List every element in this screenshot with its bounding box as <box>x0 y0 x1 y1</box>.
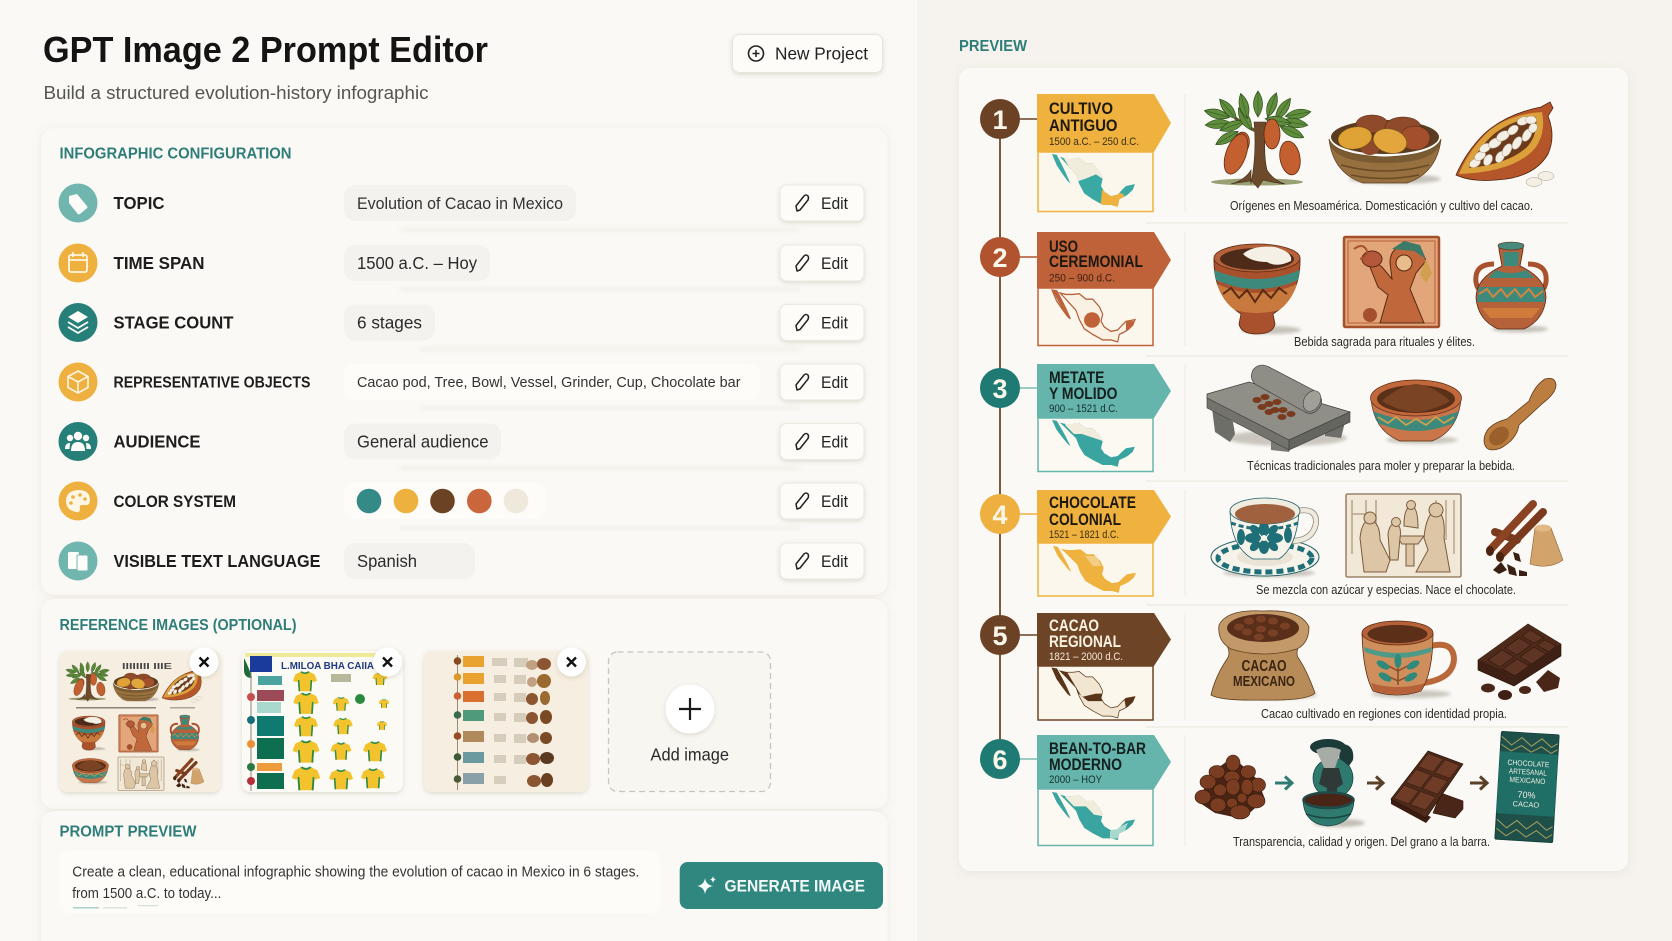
generate image button <box>680 862 883 909</box>
stage 1 <box>980 91 1554 213</box>
row: audience: Edit <box>821 434 848 452</box>
row: visible text language: Edit <box>821 553 848 571</box>
stage 4 banner: CHOCOLATE <box>1049 494 1136 512</box>
row: audience: AUDIENCE <box>114 432 200 452</box>
button: remove image 3 <box>557 648 586 676</box>
stage 4 caption: Se mezcla con azúcar y especias. Nace el chocolate. <box>1256 583 1516 597</box>
row: time span: Edit <box>821 255 848 273</box>
stage 6 banner <box>1037 735 1171 789</box>
row: stage count <box>58 303 864 342</box>
stage 4 number: 4 <box>992 500 1008 530</box>
title: GPT Image 2 Prompt Editor <box>43 29 488 70</box>
row: stage count: 6 stages <box>357 312 422 332</box>
panel: reference images <box>41 599 888 809</box>
icon: packaged chocolate: 70% <box>1517 789 1536 801</box>
icon: cacao tree <box>1203 91 1312 188</box>
panel: infographic configuration <box>41 128 888 595</box>
row: time span <box>58 244 864 282</box>
stage 6 map <box>1038 789 1153 846</box>
stage 2 <box>980 232 1548 349</box>
row: representative objects: Edit <box>821 374 848 392</box>
stage 2 banner: 250 – 900 d.C. <box>1049 272 1115 284</box>
stage 2 number <box>980 237 1040 277</box>
arrow: bar to packaged chocolate <box>1470 776 1487 790</box>
icon: metate grinding stone <box>1207 365 1350 452</box>
stage 5 banner: CACAO <box>1049 617 1099 635</box>
stage 1 banner: 1500 a.C. – 250 d.C. <box>1049 136 1139 148</box>
icon: packaged chocolate: CACAO <box>1512 799 1540 810</box>
heading: prompt preview: PROMPT PREVIEW <box>60 824 197 840</box>
stage 4 banner: 1521 – 1821 d.C. <box>1049 529 1119 541</box>
row: color system <box>58 482 864 520</box>
icon: clay mug <box>1362 621 1454 698</box>
thumbnail: cacao infographic <box>60 651 220 792</box>
stage 2 banner: USO <box>1049 238 1078 256</box>
stage 3 caption: Técnicas tradicionales para moler y preparar la bebida. <box>1247 459 1515 473</box>
stage 3 number <box>980 368 1040 408</box>
heading: preview: PREVIEW <box>959 38 1028 55</box>
icon: packaged chocolate <box>1495 731 1559 843</box>
arrow: beans to machine <box>1275 776 1292 790</box>
row: stage count: Edit <box>821 314 848 332</box>
row: topic <box>58 184 864 222</box>
row: time span: TIME SPAN <box>114 253 204 273</box>
page background: right preview column <box>917 0 1672 941</box>
icon: wooden spoon <box>1484 378 1556 450</box>
stage 2 caption: Bebida sagrada para rituales y élites. <box>1294 335 1475 349</box>
stage 6 <box>980 731 1559 849</box>
arrow: machine to bar <box>1367 776 1383 790</box>
icon: grinder machine <box>1303 739 1365 827</box>
icon: sack of cacao <box>1211 611 1317 700</box>
icon: cinnamon, piloncillo and cloves <box>1486 504 1563 576</box>
panel: prompt preview <box>41 811 888 941</box>
prompt text box: from 1500 a.C. to today... <box>72 886 221 902</box>
timeline line <box>999 119 1001 759</box>
row: stage count: STAGE COUNT <box>114 312 234 332</box>
stage 3 banner <box>1037 364 1171 418</box>
stage 1 number: 1 <box>992 105 1008 135</box>
prompt text box: Create a clean, educational infographic showing the evolution of cacao in Mexico in 6 stages. <box>72 864 639 880</box>
stage 3 <box>980 364 1556 473</box>
icon: sack of cacao: MEXICANO <box>1233 673 1295 690</box>
icon: chocolate bar pieces <box>1478 624 1561 700</box>
icon: talavera cup and saucer <box>1211 498 1319 577</box>
stage 5 caption: Cacao cultivado en regiones con identidad propia. <box>1261 707 1507 721</box>
stage 4 number <box>980 494 1040 534</box>
stage 1 banner: CULTIVO <box>1049 100 1113 118</box>
stage 3 banner: 900 – 1521 d.C. <box>1049 403 1118 415</box>
stage 1 banner <box>1037 94 1171 152</box>
row: representative objects <box>58 362 864 402</box>
icon: packaged chocolate: CHOCOLATE <box>1507 758 1550 769</box>
stage 5 number <box>980 615 1040 655</box>
icon: chocolate bar tablet <box>1391 751 1463 823</box>
button: remove image 2 <box>373 648 402 676</box>
new project button: New Project <box>775 44 868 64</box>
stage 4 banner <box>1037 490 1171 543</box>
stage 3 banner: METATE <box>1049 369 1104 387</box>
row: time span: 1500 a.C. – Hoy <box>357 253 477 273</box>
icon: packaged chocolate: MEXICANO <box>1509 775 1546 786</box>
icon: open cacao pod <box>1456 102 1554 186</box>
icon: ceremonial cup <box>1214 244 1301 334</box>
row: color system: Edit <box>821 493 848 511</box>
row: representative objects: REPRESENTATIVE OBJECTS <box>114 374 311 392</box>
row: audience <box>58 422 864 461</box>
thumbnail: jersey infographic <box>242 651 403 792</box>
heading: reference images: REFERENCE IMAGES (OPTIONAL) <box>60 617 296 634</box>
stage 5 number: 5 <box>992 621 1008 651</box>
icon: cacao beans pile <box>1195 755 1266 819</box>
stage 3 number: 3 <box>992 374 1008 404</box>
thumbnail: jersey infographic: L.MILOA BHA CAIIA <box>281 660 374 672</box>
stage 6 banner: BEAN-TO-BAR <box>1049 740 1146 758</box>
icon: mayan codex panel <box>1344 237 1439 327</box>
add image tile <box>608 652 770 792</box>
stage 3 banner: Y MOLIDO <box>1049 385 1118 403</box>
stage 3 map <box>1038 418 1153 472</box>
stage 2 number: 2 <box>992 243 1008 273</box>
stage 4 <box>980 490 1563 597</box>
new project button <box>732 34 882 72</box>
icon: basket of pods <box>1329 115 1441 184</box>
add image tile: Add image <box>650 744 729 764</box>
icon: sack of cacao: CACAO <box>1242 658 1286 675</box>
button: remove image 1 <box>190 648 218 676</box>
stage 5 banner: REGIONAL <box>1049 633 1121 651</box>
row: representative objects: Cacao pod, Tree, Bowl, Vessel, Grinder, Cup, Chocolate bar <box>357 374 740 391</box>
stage 6 caption: Transparencia, calidad y origen. Del grano a la barra. <box>1233 835 1490 849</box>
stage 6 number: 6 <box>992 745 1008 775</box>
stage 4 banner: COLONIAL <box>1049 511 1121 529</box>
icon: ground cacao bowl <box>1370 380 1462 444</box>
icon: colonial sketch panel <box>1346 494 1461 577</box>
icon: packaged chocolate: ARTESANAL <box>1509 766 1547 778</box>
thumbnail: timeline infographic <box>424 651 588 792</box>
subtitle: Build a structured evolution-history infographic <box>44 82 428 103</box>
stage 6 banner: 2000 – HOY <box>1049 774 1103 786</box>
row: topic: TOPIC <box>114 193 165 213</box>
stage 1 number <box>980 99 1040 139</box>
prompt text box <box>60 851 660 913</box>
stage 2 banner <box>1037 232 1171 288</box>
stage 6 number <box>980 739 1040 779</box>
thumbnail: cacao infographic: IIIIIIII IIIE <box>122 662 173 671</box>
row: visible text language: Spanish <box>357 551 417 571</box>
row: color system: COLOR SYSTEM <box>114 492 236 511</box>
stage 2 banner: CEREMONIAL <box>1049 253 1143 271</box>
panel: preview infographic <box>959 68 1628 871</box>
row: audience: General audience <box>357 432 488 452</box>
generate image button: GENERATE IMAGE <box>724 876 865 896</box>
stage 6 banner: MODERNO <box>1049 756 1122 774</box>
stage 5 banner: 1821 – 2000 d.C. <box>1049 651 1123 663</box>
stage 5 banner <box>1037 613 1171 666</box>
stage 5 <box>980 611 1561 721</box>
stage 1 caption: Orígenes en Mesoamérica. Domesticación y cultivo del cacao. <box>1230 199 1533 213</box>
stage 1 banner: ANTIGUO <box>1049 117 1118 135</box>
heading: infographic configuration: INFOGRAPHIC CONFIGURATION <box>60 146 292 162</box>
stage 4 map <box>1038 543 1153 596</box>
stage 1 map <box>1038 152 1153 213</box>
row: visible text language <box>58 542 864 580</box>
stage 2 map <box>1038 288 1153 346</box>
icon: painted vase <box>1476 242 1548 332</box>
row: visible text language: VISIBLE TEXT LANGUAGE <box>114 551 320 571</box>
row: topic: Evolution of Cacao in Mexico <box>357 195 563 213</box>
row: topic: Edit <box>821 195 848 213</box>
stage 5 map <box>1038 666 1153 720</box>
